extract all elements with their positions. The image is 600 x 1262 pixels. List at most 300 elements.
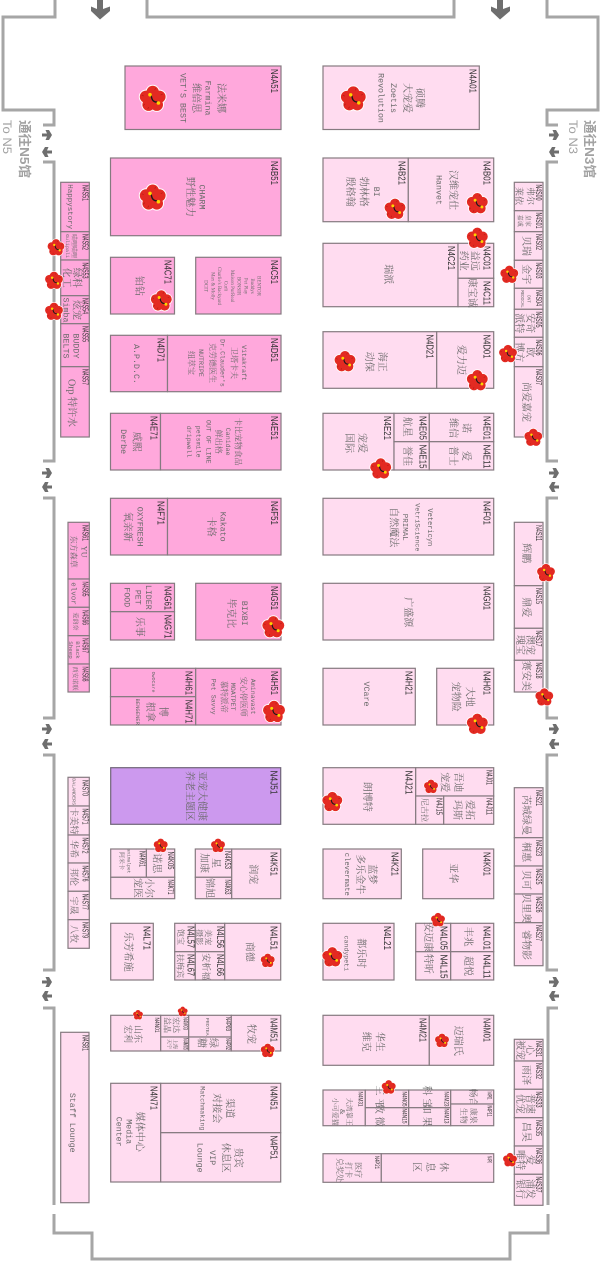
booth N4G51: BIXBI <box>239 601 248 626</box>
booth N4C51: Max & Molly <box>209 272 214 300</box>
booth N4E71 <box>110 413 160 470</box>
booth N4K05 <box>146 849 175 877</box>
booth N4H01: 大地 <box>464 687 476 707</box>
booth N4K51: N4K51 <box>268 852 279 876</box>
booth N4G01: N4G01 <box>481 586 492 610</box>
booth N4K51: 润宠 <box>247 864 260 884</box>
booth N4N15: N4N15 <box>400 1108 406 1124</box>
booth N4S66: N4S66 <box>80 610 89 625</box>
booth N4L57: 饱宝 <box>176 929 186 945</box>
booth N4S31: N4S31 <box>534 1041 543 1057</box>
booth N4S55: BUDDY <box>70 334 80 358</box>
booth N4K21: 蓝梦 <box>366 864 379 884</box>
booth N4L05: N4L05 <box>438 926 449 950</box>
booth N4J01: 宠爱 <box>438 772 452 792</box>
booth N4L15: N4L15 <box>438 954 449 979</box>
booth N4K05: 诺思 <box>150 853 164 874</box>
booth N4S06: 欧 <box>524 347 537 357</box>
booth N4S68: 西安诺联 <box>71 666 79 691</box>
booth N4S11 <box>514 522 543 586</box>
booth N4S57: Orp 特许水 <box>66 379 78 427</box>
booth N4M31: & <box>338 1109 346 1115</box>
booth N4S07: N4S07 <box>534 369 543 385</box>
booth N4N71: N4N71 <box>148 1086 159 1110</box>
booth N4S52 <box>61 232 89 260</box>
booth N4G51 <box>196 583 281 640</box>
booth N4L71: 乐芳希施 <box>122 932 135 972</box>
booth N4C51: BONSIR <box>236 277 241 296</box>
booth N4J51 theme zone: 亚宠大健康 <box>196 771 209 821</box>
booth N4M31: 小可爱猫 <box>331 1098 340 1126</box>
booth N4L21 <box>323 923 394 980</box>
booth N4L21: N4L21 <box>381 926 392 950</box>
booth N4C51: N4C51 <box>268 260 279 284</box>
booth N4S32 <box>514 1061 543 1089</box>
booth N4F71: 氧亲新 <box>122 512 134 542</box>
booth N4S71 <box>68 806 89 835</box>
booth N4N71: Media <box>124 1119 134 1144</box>
booth N4B01: N4B01 <box>481 161 492 185</box>
booth N4J15: 尼古拉 <box>420 798 430 822</box>
booth N4S67: N4S67 <box>80 638 89 653</box>
booth N4E51: petsmile <box>195 426 203 458</box>
booth N4E71: Derbe <box>118 429 128 454</box>
booth N4L56: N4L56 <box>214 926 225 948</box>
booth N4S17: 瑰宝 <box>514 635 527 655</box>
booth N4S15: N4S15 <box>534 588 543 604</box>
booth N4K63 <box>195 877 232 899</box>
booth N4S03: 金宇 <box>520 264 533 284</box>
booth N4P51: 休息区 <box>220 1143 232 1173</box>
booth N4S33: 优宠 <box>514 1094 527 1114</box>
booth N4H51: 安心停医师 <box>239 677 249 717</box>
booth N4H61 <box>110 668 196 697</box>
booth N4G61: N4G61 <box>162 586 172 610</box>
booth N4S05 <box>513 309 543 337</box>
booth N4G71: N4G71 <box>162 614 172 639</box>
booth N4S17 <box>514 628 543 660</box>
booth N4S53: 绿科 <box>70 268 84 288</box>
booth N4S65 <box>68 579 89 607</box>
booth N4D71 <box>110 335 168 392</box>
booth N4E71: 威熙 <box>130 432 144 453</box>
booth N4G51: N4G51 <box>268 586 279 610</box>
booth N4S04: N4S04 <box>534 290 543 306</box>
booth N4N01: 山东 <box>133 1025 144 1043</box>
booth N4S53: 化工 <box>60 268 74 288</box>
booth N4B51 <box>110 158 281 236</box>
booth N4H61: N4H61 <box>183 671 194 695</box>
booth N4S31: 被宠 <box>514 1040 527 1060</box>
entrance arrows <box>91 0 510 20</box>
booth N4K21: N4K21 <box>388 852 399 876</box>
booth N4D71: N4D71 <box>154 338 166 362</box>
booth N4S18: 赛安美 <box>520 661 533 691</box>
booth N4S04: DNT <box>526 295 530 303</box>
booth N4N51: 对接会 <box>210 1093 224 1123</box>
booth N4D21: 动保 <box>363 352 376 372</box>
booth N4D51: Vitakraft <box>240 345 248 381</box>
booth N4S25 <box>514 866 543 894</box>
booth N4L01 <box>451 923 494 952</box>
booth N4S03 <box>514 260 543 288</box>
booth N4M23: N4M23 <box>442 1092 448 1107</box>
icons: smiling red flowers <box>45 86 555 1166</box>
booth N4S00: N4S00 <box>534 184 543 201</box>
booth N4A01: 大宠爱 <box>401 83 414 113</box>
booth N4H01: N4H01 <box>481 671 492 695</box>
booth N4A51: N4A51 <box>268 69 279 93</box>
booth N4A51: VET'S BEST <box>178 73 188 123</box>
booth N4S52: 喵哩喵哩 <box>70 234 78 258</box>
booth N4S53: N4S53 <box>80 262 89 279</box>
booth N4E15: N4E15 <box>416 444 427 469</box>
booth N4F01: PRIMAL <box>400 514 408 541</box>
booth N4H01 <box>437 668 494 725</box>
booth N4E15: 誉佳 <box>401 446 414 466</box>
booth N4L11 <box>451 952 494 980</box>
booth N4M21: 维克 <box>360 1032 373 1052</box>
booth N4S06 <box>513 337 543 367</box>
booth N4J15 <box>416 796 444 824</box>
booth N4M03 <box>161 1015 189 1037</box>
booth N4M01 <box>429 1015 494 1065</box>
booth N4D21: N4D21 <box>424 334 435 359</box>
booth N4F71 <box>110 498 168 555</box>
booth N4S01 <box>514 211 543 232</box>
booth N4H51 <box>196 668 281 725</box>
booth N4J11: 玛斯 <box>451 800 464 820</box>
booth N4S37: 银行 <box>514 1179 527 1199</box>
passage arrows <box>42 130 559 1001</box>
booth N4K01: 亚华 <box>447 863 460 883</box>
booth N4H51: 慕特派帝 <box>219 681 229 713</box>
booth N4S05: 派特 <box>513 313 526 333</box>
booth N4L71: N4L71 <box>140 926 151 950</box>
booth N4M03: 宏达 <box>172 1017 182 1033</box>
booth N4N51: 渠道 <box>224 1098 236 1118</box>
booth N4S32: N4S32 <box>534 1063 543 1079</box>
booth N4E51: dripwell <box>185 426 193 458</box>
booth N4H71: 博 <box>157 707 170 717</box>
booth N4M51: N4M51 <box>268 1018 279 1042</box>
booth N4S31: 心 <box>524 1045 536 1056</box>
booth N4P21 <box>323 1154 381 1182</box>
booth N4N01: 宏利 <box>123 1025 134 1043</box>
booth N4S26: 贝里奥 <box>520 893 533 923</box>
booth N4J21: 朗博特 <box>361 782 374 812</box>
booth N4K21: clevermate <box>342 853 350 896</box>
booth N4L21: candypeti <box>343 935 350 971</box>
booth N4P11: 康泉 <box>469 1108 479 1124</box>
booth N4J51 theme zone: N4J51 <box>268 770 279 795</box>
booth N4S57: N4S57 <box>80 369 89 385</box>
booth N4S35: N4S35 <box>534 1120 543 1136</box>
booth N4P01: N4P01 <box>486 1092 492 1100</box>
booth N4B01: 汉维宠仕 <box>447 170 460 210</box>
booth N4N05: 三平 <box>373 1086 385 1112</box>
booth N4P21: N4P21 <box>373 1156 379 1169</box>
booth N4G61: LIDER <box>143 585 152 610</box>
booth N4S36: 唯特 <box>514 1150 527 1170</box>
booth N4L01: 丰兆 <box>462 927 475 947</box>
booth N4P02: N4P02 <box>224 1038 230 1050</box>
booth N4S66 <box>68 607 89 636</box>
booth N4A51: 法米娜 <box>215 83 228 113</box>
booth N4K53 <box>195 849 232 877</box>
heading: to N5: To N5 <box>0 120 14 154</box>
booth N4E11: 普士 <box>447 446 460 466</box>
booth N4E05: 航星 <box>401 417 414 437</box>
heading: to N5: 通往N5馆 <box>17 120 32 178</box>
booth N4L05: 安迈康 <box>422 922 435 952</box>
booth N4S25: 贝可 <box>520 870 532 890</box>
booth N4P0 rest area: 休 <box>438 1162 450 1172</box>
booth N4D51 <box>168 335 281 392</box>
booth N4E15 <box>394 442 429 470</box>
booth N4B21 <box>323 158 408 222</box>
booth N4M13: N4M13 <box>442 1108 448 1124</box>
booth N4J11: 爱拓 <box>464 800 476 820</box>
booth N4M31: N4M31 <box>356 1092 362 1107</box>
booth N4P11 <box>451 1104 494 1126</box>
booth N4M01: N4M01 <box>481 1018 492 1042</box>
booth N4E21: 宠爱 <box>356 433 369 453</box>
booth N4S33 <box>514 1089 543 1118</box>
booth N4S37 <box>514 1174 543 1205</box>
booth N4S77: N4S77 <box>80 894 89 910</box>
booth N4S35 <box>514 1118 543 1146</box>
booth N4C51: BENTOR <box>256 276 260 297</box>
booth N4S02: 贝瑞 <box>520 236 533 256</box>
booth N4S00: 莱依 <box>514 187 525 205</box>
booth N4S26: N4S26 <box>534 896 543 913</box>
booth N4E11: N4E11 <box>481 444 492 469</box>
booth N4C51: Buddys <box>249 278 254 294</box>
booth N4L71 <box>111 923 153 980</box>
booth N4S61: 东方森草 <box>69 536 79 568</box>
booth N4S21: 芮城绿曼 <box>520 795 533 835</box>
booth N4E51: 卡比宠物食品 <box>234 418 244 466</box>
booth N4K53: 加康 <box>198 853 211 873</box>
booth N4S70: N4S70 <box>80 780 89 796</box>
booth N4S27 <box>514 923 543 966</box>
booth N4S07 <box>514 367 543 437</box>
booth N4B01 <box>408 158 494 222</box>
booth N4L51: N4L51 <box>268 926 279 950</box>
booth N4S61 <box>68 522 89 579</box>
booth N4S18: N4S18 <box>534 662 543 679</box>
booth N4S04: MEDICAL <box>519 290 523 308</box>
booth N4G61: FOOD <box>122 587 131 607</box>
booth N4M05: 天宇 <box>166 1039 172 1049</box>
booth N4E51: OUT OF LINE <box>204 420 212 464</box>
booth N4L56: 美宠 <box>204 929 214 945</box>
booth N4S65: N4S65 <box>80 582 89 597</box>
booth N4N71 <box>111 1083 161 1182</box>
booth N4M21: N4M21 <box>416 1018 427 1042</box>
booth N4K71: N4K71 <box>166 880 175 895</box>
booth N4S11: 辉鹏 <box>520 543 533 563</box>
booth N4E01 <box>429 413 494 442</box>
booth N4J51 theme zone: 养老主题区 <box>184 771 196 821</box>
booth N4C11: 康宝诚 <box>466 278 479 308</box>
booth N4B51: 野性魅力 <box>184 177 197 217</box>
booth N4S26 <box>514 893 543 923</box>
booth N4S55: BELTS <box>60 334 70 358</box>
booth N4N15: 致微 <box>373 1104 386 1130</box>
booth N4A01: N4A01 <box>466 69 477 93</box>
booth N4S23: 桐惠 <box>520 842 533 863</box>
booth N4E51: 鲜出格 <box>214 430 224 454</box>
booth N4S61: YU <box>80 546 88 558</box>
booth N4M23: 科宝 <box>420 1086 434 1112</box>
booth N4L67: 扶梅宾 <box>176 954 186 978</box>
booth N4S17: 澳宠 <box>524 635 537 655</box>
booth N4D01 <box>437 332 494 388</box>
booth N4K51 <box>232 849 281 899</box>
booth N4E71: N4E71 <box>148 416 158 440</box>
booth N4S72: N4S72 <box>80 838 89 854</box>
heading: to N3 <box>566 120 597 178</box>
booth N4J01: 吾迪 <box>452 772 465 792</box>
booth N4P03: PROTEA <box>204 1018 210 1036</box>
booth N4J01 <box>416 768 494 796</box>
booth N4A01: Revolution <box>375 73 385 123</box>
booth N4S76 <box>68 863 89 891</box>
booth N4H51: Pet Savvy <box>209 679 217 715</box>
booth N4S27: N4S27 <box>534 925 543 941</box>
booth N4H21 <box>323 668 415 725</box>
booth N4S54: 炫宠 <box>70 300 84 320</box>
booth N4H51: N4H51 <box>268 671 279 695</box>
booth N4S67: Sheep <box>67 641 74 659</box>
booth N4C51: Charlie's Backyard <box>216 267 221 305</box>
booth N4S00 <box>514 182 543 211</box>
booth N4M05: 上海 <box>172 1039 178 1049</box>
booth N4B51: CHARM <box>196 185 206 209</box>
booth N4P51: VIP <box>207 1150 216 1165</box>
booth N4C21 <box>323 243 458 307</box>
booth N4S79 <box>68 920 89 948</box>
booth N4E05 <box>394 413 429 442</box>
booth N4K61 <box>111 849 146 877</box>
booth N4S11: N4S11 <box>534 525 543 541</box>
booth N4N51 <box>161 1083 281 1133</box>
booth N4M03: 益晶 <box>162 1017 172 1033</box>
booth N4D71: A.P.D.C. <box>131 344 140 384</box>
booth N4C21: 瑞派 <box>382 264 395 284</box>
booth N4S71: 卡美特 <box>69 807 80 835</box>
heading: to N5 <box>0 120 32 178</box>
booth N4L05 <box>416 922 451 952</box>
booth N4J11 <box>444 796 494 824</box>
booth N4H71: BENGENER <box>134 698 141 726</box>
booth N4D21: 海正 <box>376 352 389 372</box>
booth N4C71: N4C71 <box>162 260 172 284</box>
booth N4S81: Staff Lounge <box>67 1093 77 1153</box>
booth N4S71: N4S71 <box>80 808 89 825</box>
booth N4S02: N4S02 <box>534 234 543 250</box>
booth N4L66: N4L66 <box>214 954 225 976</box>
booth N4P0 rest area: 息 <box>424 1162 437 1173</box>
booth N4S51: N4S51 <box>80 185 89 201</box>
booth N4S25: N4S25 <box>534 868 543 885</box>
booth N4D51: Dr.Clauder's <box>219 339 227 387</box>
booth N4L56: 摄影 <box>194 929 204 945</box>
booth N4B01: Hanvet <box>434 175 442 205</box>
booth N4S54: N4S54 <box>80 298 89 314</box>
booth N4H21: N4H21 <box>402 671 413 695</box>
booth N4D51: N4D51 <box>268 338 279 362</box>
booth N4S23: N4S23 <box>534 840 543 856</box>
booth N4P21: 打卡 <box>344 1162 354 1178</box>
booth N4S70: DALANDERS <box>70 778 76 805</box>
booth N4S21 <box>514 788 543 838</box>
booth N4K21: 多乐金牛 <box>354 854 367 894</box>
booth N4S61: N4S61 <box>80 525 89 541</box>
booth N4S55: N4S55 <box>80 326 89 342</box>
booth N4L67 <box>175 952 196 980</box>
booth N4D21 <box>323 332 437 388</box>
booth N4F01: VetriScience <box>412 503 420 551</box>
booth N4K61: 阿米卡 <box>118 852 126 870</box>
booth N4S05: 安奇 <box>524 313 537 333</box>
booth N4J01: N4J01 <box>484 770 494 785</box>
booth N4S33: 普速 <box>524 1094 537 1114</box>
booth N4E11: 爱 <box>460 451 472 461</box>
booth N4H51: MOATPET <box>229 683 237 711</box>
booth N4E01: 诺 <box>460 423 473 433</box>
booth N4M31: 大湾靠王 <box>345 1098 354 1126</box>
booth N4M23 <box>409 1086 451 1112</box>
booth N4M01: 迈瑞氏 <box>452 1026 465 1056</box>
booth N4N05 <box>365 1086 409 1112</box>
booth N4C21: N4C21 <box>445 246 456 270</box>
booth N4P03: N4P03 <box>224 1017 230 1031</box>
booth N4P0 rest area: N4P0 <box>486 1156 492 1163</box>
booth N4D01: 爱力迈 <box>455 345 468 375</box>
booth N4N51: Matchmaking <box>198 1086 206 1130</box>
booth N4J51 theme zone <box>111 768 281 824</box>
booth N4E21: 国际 <box>343 433 355 454</box>
booth N4L15: 特昕 <box>422 954 435 974</box>
booth N4S05: N4S05 <box>534 312 543 328</box>
booth N4S23 <box>514 838 543 866</box>
booth N4S07: 尚爱嘉宠 <box>520 382 533 422</box>
booth N4H21: VCare <box>361 682 370 706</box>
booth N4S15 <box>514 586 543 628</box>
booth N4F51: N4F51 <box>268 501 279 525</box>
booth N4S70 <box>68 777 89 806</box>
booth N4S55 <box>60 324 89 367</box>
booth N4C01: N4C01 <box>481 246 492 270</box>
booth N4F51 <box>168 498 281 555</box>
booth N4L66: 安析福 <box>201 953 212 980</box>
booth N4L51 <box>225 923 281 980</box>
booth N4S21: N4S21 <box>534 790 543 806</box>
booth N4E21: N4E21 <box>381 416 392 440</box>
booth N4S81 <box>61 1032 89 1203</box>
booth N4N01: N4N01 <box>153 1018 159 1033</box>
booth N4S06: 博方 <box>513 342 526 362</box>
booth N4P21: 医疗 <box>354 1162 364 1178</box>
booth N4J21 <box>323 768 416 824</box>
booth N4E05: N4E05 <box>416 416 427 440</box>
booth N4L57: N4L57 <box>184 926 196 948</box>
booth N4P21: 兑奖处 <box>335 1158 345 1182</box>
booth N4S65: elvor <box>68 582 76 605</box>
